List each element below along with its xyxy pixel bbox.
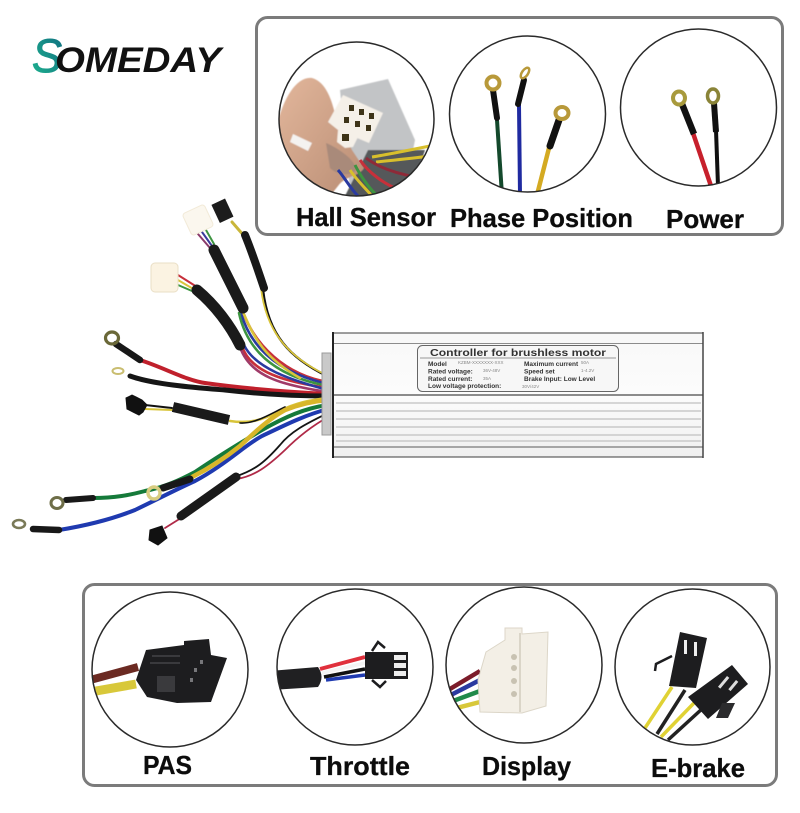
panel: motor connections xyxy=(256,18,782,234)
product label: Speed set xyxy=(524,368,556,376)
icon: throttle connector xyxy=(270,589,433,745)
label: Hall Sensor: Hall Sensor xyxy=(296,202,436,232)
icon: PAS connector xyxy=(90,592,248,747)
wire group: white connector xyxy=(151,263,328,392)
product label: KZBM-XXXXXXX-XXX xyxy=(458,360,504,365)
product label: Brake Input: Low Level xyxy=(524,376,595,383)
side mounting tab xyxy=(322,353,331,435)
label: Power: Power xyxy=(666,204,744,234)
label: Display: Display xyxy=(482,751,572,781)
product label: Rated voltage: xyxy=(428,368,473,376)
controller body xyxy=(322,332,703,458)
wire: yellow phase xyxy=(148,400,328,499)
icon: phase position wires xyxy=(450,36,606,195)
wire: black power xyxy=(112,368,328,396)
icon: display connector xyxy=(445,587,602,743)
icon: hall sensor connector xyxy=(276,42,434,196)
wire: blue phase xyxy=(13,409,328,530)
product label: 30V/42V xyxy=(522,384,539,389)
wire harness xyxy=(13,199,328,545)
wire: green phase xyxy=(51,405,328,508)
icon: e-brake connectors xyxy=(615,589,770,745)
product label xyxy=(418,346,618,392)
product label: 50A xyxy=(581,360,589,365)
product label: Low voltage protection: xyxy=(428,383,501,390)
logo: SOMEDAY: S xyxy=(32,29,62,82)
product label: Rated current: xyxy=(428,376,472,383)
label: Throttle: Throttle xyxy=(310,751,410,781)
product label: Controller for brushless motor xyxy=(430,347,606,359)
product label: 35A xyxy=(483,376,491,381)
product label: Maximum current xyxy=(524,361,579,368)
wire: red power xyxy=(106,332,328,394)
logo: SOMEDAY xyxy=(32,29,224,82)
product label: 36V-48V xyxy=(483,368,500,373)
label: PAS: PAS xyxy=(143,750,192,780)
label: Phase Position: Phase Position xyxy=(450,203,633,233)
label: E-brake: E-brake xyxy=(651,753,745,783)
wire group: top black connector xyxy=(211,199,327,376)
panel: control connectors xyxy=(84,584,776,786)
logo: SOMEDAY: OMEDAY xyxy=(55,41,224,80)
wire group: throttle connector xyxy=(149,413,328,545)
wire group: PAS connector xyxy=(126,395,328,423)
product label: Model xyxy=(428,361,447,368)
product label: 1-4.2V xyxy=(581,368,594,373)
icon: power wires xyxy=(620,29,776,186)
wire group: display connector xyxy=(182,204,328,386)
